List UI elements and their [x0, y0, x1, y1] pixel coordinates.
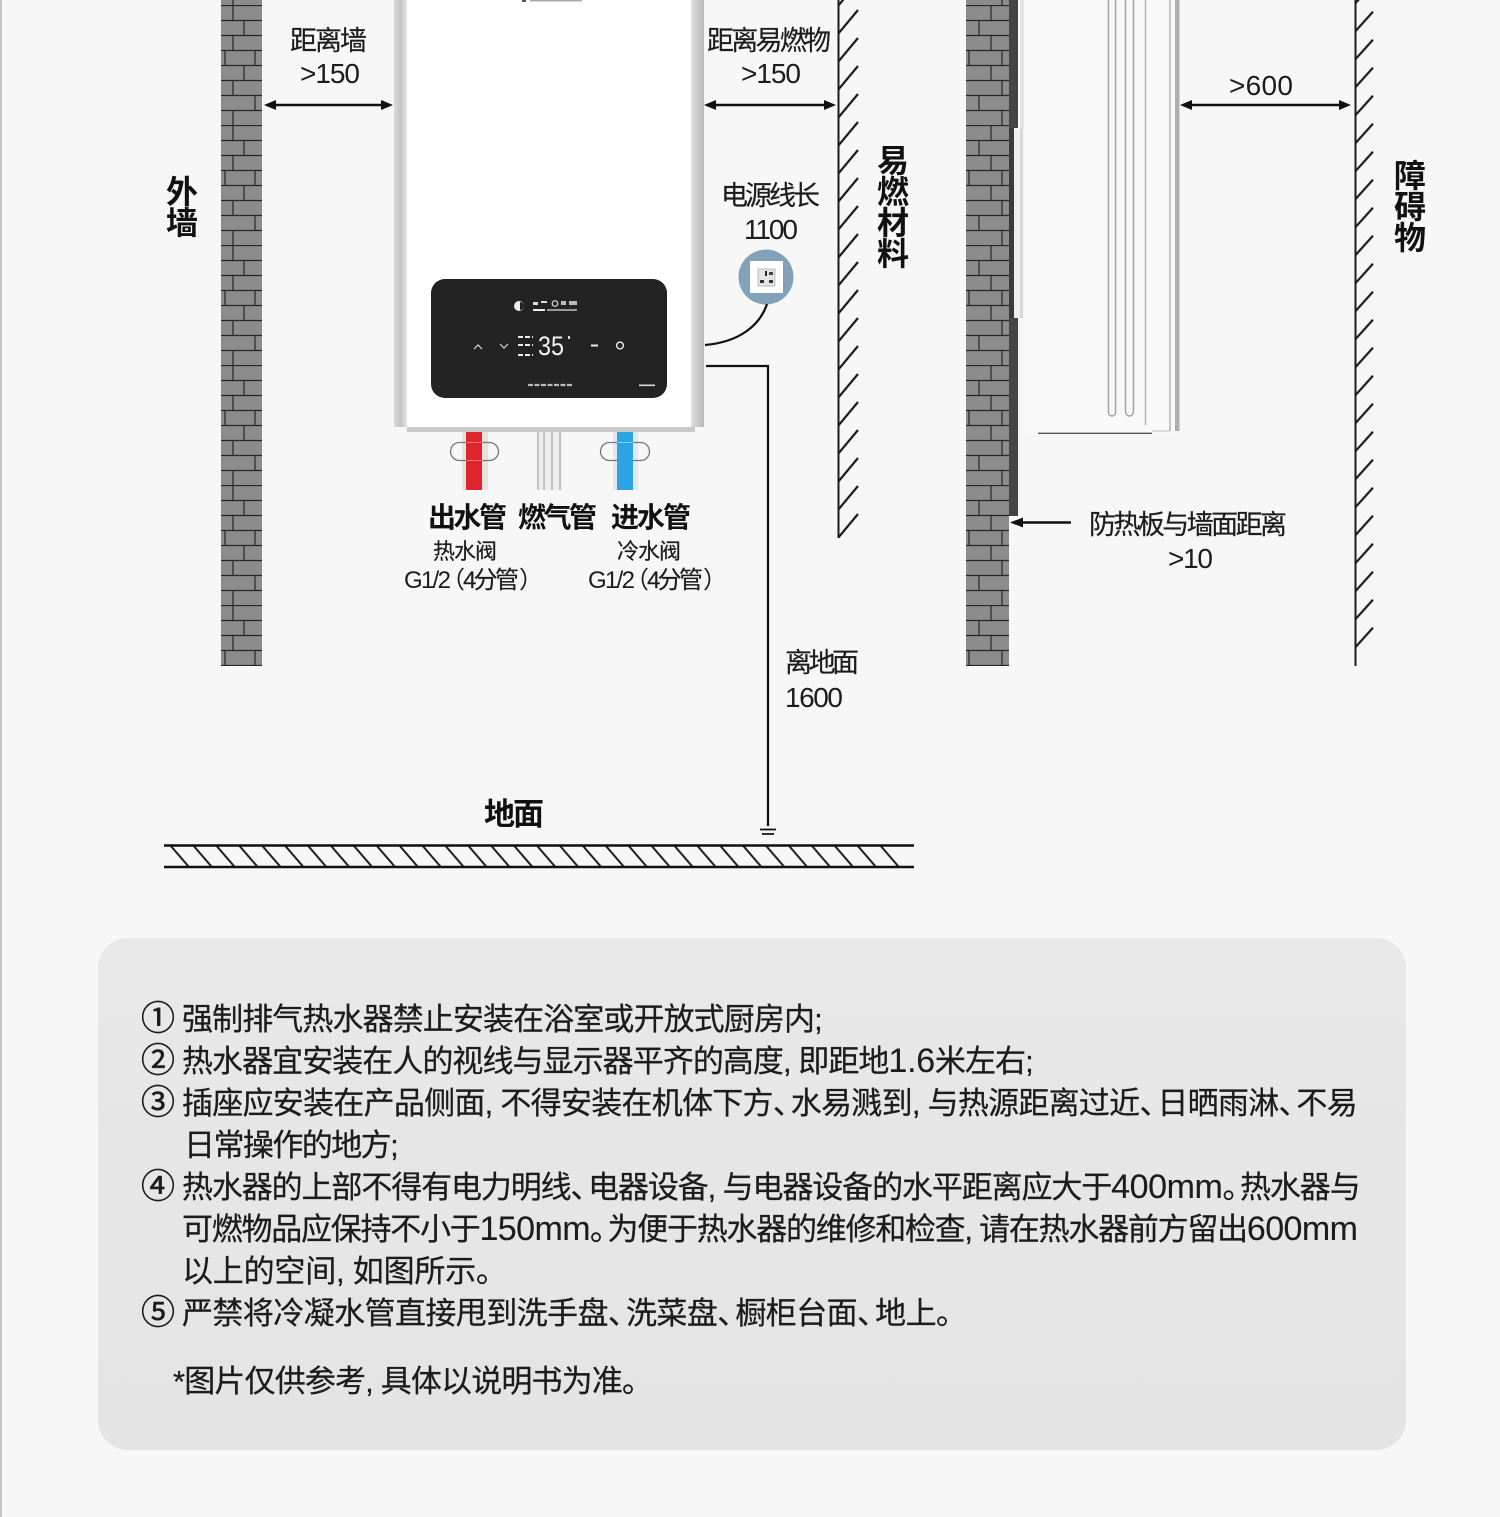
- text: heat shield distance: 防热板与墙面距离: [1089, 510, 1287, 540]
- label: combustible material: 材: [877, 205, 909, 241]
- text: hot water valve spec: （: [441, 567, 465, 594]
- label: obstacle: 障: [1394, 158, 1426, 194]
- text: heat shield distance: >10: [1168, 543, 1213, 574]
- text: distance from wall: [290, 26, 367, 89]
- note 4: [141, 1168, 1360, 1289]
- note 2: 热水器宜安装在人的视线与显示器平齐的高度, 即距地1.6米左右;: [182, 1042, 1033, 1080]
- label: obstacle: [1394, 158, 1426, 256]
- label: exterior wall: 外: [166, 174, 198, 210]
- note 1: 强制排气热水器禁止安装在浴室或开放式厨房内;: [182, 1002, 822, 1037]
- heat shield board: [1009, 0, 1018, 516]
- water heater body: [394, 0, 704, 432]
- note 4: 可燃物品应保持不小于150mm。为便于热水器的维修和检查, 请在热水器前方留出600mm: [182, 1210, 1358, 1248]
- hatched wall: combustible material: [838, 0, 859, 538]
- text: cold water valve spec: 冷水阀: [617, 539, 681, 564]
- text: power cord length: [721, 181, 820, 245]
- distance arrow: to combustibles: [704, 100, 836, 110]
- note 3: 日常操作的地方;: [184, 1128, 398, 1163]
- text: height from floor: 离地面: [785, 648, 859, 678]
- note 4: ④: [141, 1168, 175, 1206]
- note 4: 热水器的上部不得有电力明线、电器设备, 与电器设备的水平距离应大于400mm。热水器与: [182, 1168, 1360, 1206]
- text: cold water valve spec: 4分管: [647, 567, 703, 594]
- text: cold water valve spec: （: [625, 567, 649, 594]
- label: obstacle: 碍: [1394, 189, 1426, 225]
- floor hatch: [164, 845, 914, 867]
- pipe: cold water inlet: [600, 432, 650, 490]
- distance arrow: to wall: [264, 100, 393, 110]
- note 2: ②: [141, 1042, 175, 1080]
- label: exterior wall: [166, 174, 198, 241]
- pipe labels: 出水管: [428, 502, 507, 533]
- label: combustible material: [877, 143, 909, 272]
- note 5: ⑤: [141, 1294, 175, 1332]
- text: heat shield distance: [1089, 510, 1287, 574]
- note 3: 插座应安装在产品侧面, 不得安装在机体下方、水易溅到, 与热源距离过近、日晒雨淋、不易: [182, 1086, 1357, 1121]
- note 3: ③: [141, 1084, 175, 1122]
- label: combustible material: 燃: [877, 174, 909, 210]
- label: exterior wall: 墙: [166, 205, 198, 241]
- label: combustible material: 易: [877, 143, 909, 179]
- control panel display: [431, 279, 667, 398]
- note 1: ①: [141, 1000, 175, 1038]
- control panel display: 35: [538, 331, 564, 361]
- hatched wall: obstacle: [1355, 0, 1375, 666]
- text: power cord length: 1100: [744, 214, 798, 245]
- pipe labels: [428, 502, 691, 533]
- arrow: to heat shield: [1010, 518, 1071, 528]
- text: hot water valve spec: G1/2: [404, 567, 451, 594]
- text: cold water valve spec: ）: [703, 567, 727, 594]
- pipe: gas: [537, 432, 562, 490]
- label: obstacle: 物: [1394, 220, 1426, 256]
- text: height from floor: 1600: [785, 682, 843, 713]
- label: floor: 地面: [484, 797, 544, 832]
- text: distance from wall: >150: [300, 58, 360, 89]
- water heater side view: [1014, 0, 1180, 433]
- text: distance from combustibles: >150: [741, 58, 801, 89]
- note 4: 以上的空间, 如图所示。: [182, 1254, 494, 1289]
- panel: installation notes: [98, 938, 1406, 1450]
- text: hot water valve spec: [404, 539, 543, 594]
- text: distance from combustibles: 距离易燃物: [707, 26, 831, 56]
- note 3: [141, 1084, 1357, 1163]
- pipe labels: 进水管: [611, 502, 691, 533]
- power cord: [705, 304, 767, 345]
- text: cold water valve spec: [588, 539, 727, 594]
- brick wall: side view: [966, 0, 1009, 666]
- text: hot water valve spec: ）: [519, 567, 543, 594]
- pipe: hot water outlet: [450, 432, 498, 490]
- brick wall: exterior wall: [221, 0, 262, 666]
- disclaimer: *图片仅供参考, 具体以说明书为准。: [173, 1364, 640, 1399]
- pipe labels: 燃气管: [518, 502, 597, 533]
- text: cold water valve spec: G1/2: [588, 567, 635, 594]
- label: combustible material: 料: [877, 236, 909, 272]
- icon: power socket: [738, 250, 794, 304]
- text: hot water valve spec: 4分管: [463, 567, 519, 594]
- text: distance from wall: 距离墙: [290, 26, 367, 56]
- distance arrow: to obstacle: [1180, 100, 1351, 110]
- text: distance from combustibles: [707, 26, 831, 89]
- text: clearance 600: >600: [1229, 70, 1293, 101]
- text: hot water valve spec: 热水阀: [433, 539, 497, 564]
- ground height line: [706, 366, 776, 834]
- note 5: 严禁将冷凝水管直接甩到洗手盘、洗菜盘、橱柜台面、地上。: [182, 1296, 954, 1331]
- text: power cord length: 电源线长: [721, 181, 820, 211]
- text: height from floor: [785, 648, 859, 713]
